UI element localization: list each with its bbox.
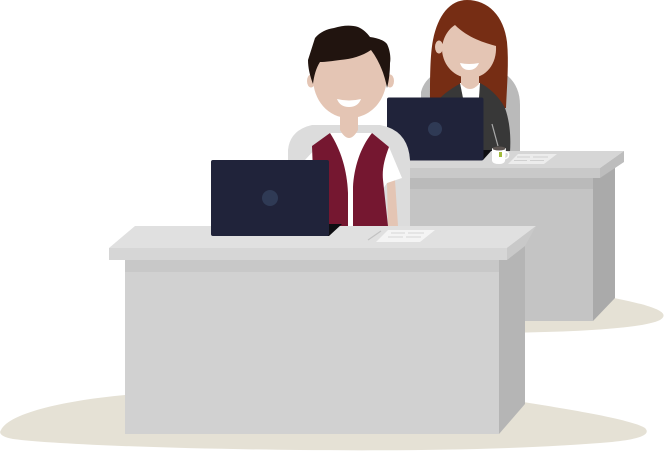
front desk papers bbox=[376, 230, 435, 242]
man's t-shirt bbox=[305, 133, 402, 226]
man's vest right bbox=[353, 133, 389, 226]
woman's ear bbox=[435, 40, 443, 54]
woman's hair bbox=[430, 0, 508, 110]
front desk top bbox=[109, 226, 536, 248]
pen bbox=[492, 124, 498, 146]
back laptop shadow bbox=[476, 150, 492, 160]
woman's smile bbox=[460, 63, 479, 70]
woman's jacket bbox=[440, 83, 510, 152]
floor shadow: back desk bbox=[500, 294, 664, 333]
front laptop logo bbox=[262, 190, 278, 206]
back desk bbox=[387, 98, 624, 321]
back desk front edge bbox=[405, 168, 600, 178]
front desk side panel bbox=[499, 240, 525, 434]
man's arm bbox=[387, 180, 398, 226]
front desk body bbox=[125, 260, 499, 434]
man's vest left bbox=[312, 133, 348, 226]
back desk body bbox=[405, 178, 593, 321]
woman's chair bbox=[421, 73, 520, 160]
front desk bbox=[109, 160, 536, 434]
back desk top bbox=[405, 151, 624, 168]
back laptop bbox=[387, 98, 484, 160]
man's neck bbox=[340, 112, 358, 138]
back desk side panel bbox=[593, 165, 615, 321]
pencil bbox=[368, 231, 381, 240]
man's face bbox=[313, 45, 387, 118]
man's smile bbox=[337, 99, 361, 107]
coffee mug bbox=[492, 146, 509, 164]
woman's shirt bbox=[460, 83, 480, 98]
front desk front edge bbox=[109, 248, 507, 260]
back desk underside shadow bbox=[405, 178, 593, 189]
woman: seated figure behind the back desk bbox=[421, 0, 520, 160]
back desk papers bbox=[508, 154, 557, 164]
front desk edge side bbox=[507, 226, 536, 260]
man: seated figure behind the front desk bbox=[288, 26, 410, 228]
woman's neck bbox=[461, 70, 479, 89]
front laptop bbox=[211, 160, 329, 236]
man's ears bbox=[307, 74, 394, 88]
back laptop logo bbox=[428, 122, 442, 136]
front laptop shadow bbox=[322, 224, 342, 236]
front desk underside shadow bbox=[125, 260, 499, 272]
man's hair bbox=[308, 26, 390, 88]
woman's face bbox=[442, 25, 496, 78]
man's chair bbox=[288, 125, 410, 228]
back desk edge side bbox=[600, 151, 624, 178]
floor shadow: front desk bbox=[0, 395, 647, 450]
